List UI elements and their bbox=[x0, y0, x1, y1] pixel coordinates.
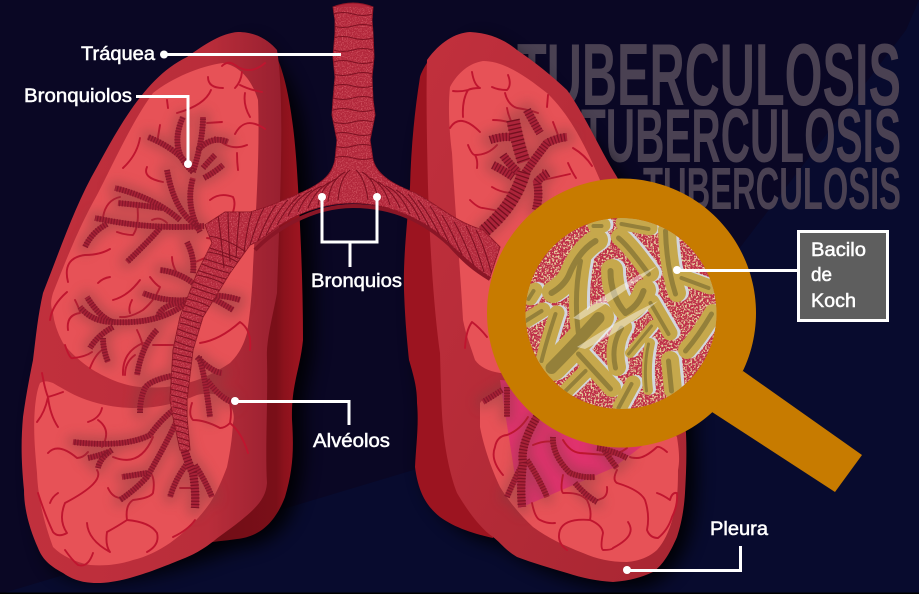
bronchioles: rings bbox=[73, 117, 627, 502]
right lung: back layer bbox=[404, 36, 520, 538]
bronchi: wide branches bbox=[483, 120, 524, 232]
label: Bronquiolos bbox=[24, 86, 192, 168]
callout: Bacilo de Koch: Bacilo bbox=[811, 240, 866, 261]
bronchial tree bbox=[73, 110, 627, 508]
right lung: lower lobe bbox=[480, 389, 679, 562]
lens speckle bbox=[525, 217, 718, 410]
callout: Bacilo de Koch: de bbox=[811, 265, 832, 286]
bronchiole shadows bbox=[73, 110, 627, 508]
bacilli: Koch bacteria bbox=[526, 222, 716, 408]
title: repeated TUBERCULOSIS bbox=[517, 25, 901, 222]
label: Pleura bbox=[623, 519, 768, 574]
glass reflection bbox=[573, 266, 658, 349]
label: Pleura: Pleura bbox=[710, 519, 768, 540]
left lung: back layer bbox=[200, 47, 303, 545]
arch rim bbox=[255, 206, 490, 279]
left lung: pleura layer bbox=[22, 32, 281, 583]
label: Alvéolos: Alvéolos bbox=[313, 431, 390, 452]
right lung bbox=[73, 32, 696, 589]
airway grain bbox=[160, 0, 510, 460]
bacilli: highlights bbox=[530, 222, 716, 406]
callout: Bacilo de Koch: Koch bbox=[811, 291, 856, 312]
lens tissue bbox=[525, 218, 717, 410]
label: Tráquea bbox=[81, 44, 341, 65]
callout: Bacilo de Koch bbox=[673, 232, 888, 320]
left lung: veins bbox=[37, 63, 265, 566]
bronchioles: thin branches bbox=[73, 117, 627, 502]
bacilli: dark bands bbox=[526, 224, 712, 408]
bronchioles: medium branches bbox=[177, 110, 567, 508]
left lung: upper lobe bbox=[51, 63, 259, 388]
label: Bronquios bbox=[311, 193, 402, 292]
right lung: upper lobe bbox=[449, 61, 602, 373]
airway wrinkles bbox=[170, 12, 492, 447]
ring bbox=[487, 178, 756, 448]
airway body bbox=[170, 3, 500, 450]
magnifying glass bbox=[487, 178, 862, 492]
infected area bbox=[500, 380, 650, 508]
right lung: veins bbox=[450, 72, 677, 550]
label: Alvéolos bbox=[231, 397, 390, 452]
handle bbox=[712, 371, 862, 492]
bacilli: bodies bbox=[527, 223, 713, 407]
bronchi: wide rings bbox=[483, 120, 524, 232]
trachea and main bronchi bbox=[160, 0, 510, 460]
left lung bbox=[22, 32, 314, 583]
right lung: pleura layer bbox=[427, 32, 686, 582]
left lung: lower lobe bbox=[34, 381, 234, 565]
label: Bronquiolos: Bronquiolos bbox=[24, 86, 132, 107]
label: Bronquios: Bronquios bbox=[311, 271, 402, 292]
label: Tráquea: Tráquea bbox=[81, 44, 155, 65]
bronchioles: medium rings bbox=[177, 110, 567, 508]
